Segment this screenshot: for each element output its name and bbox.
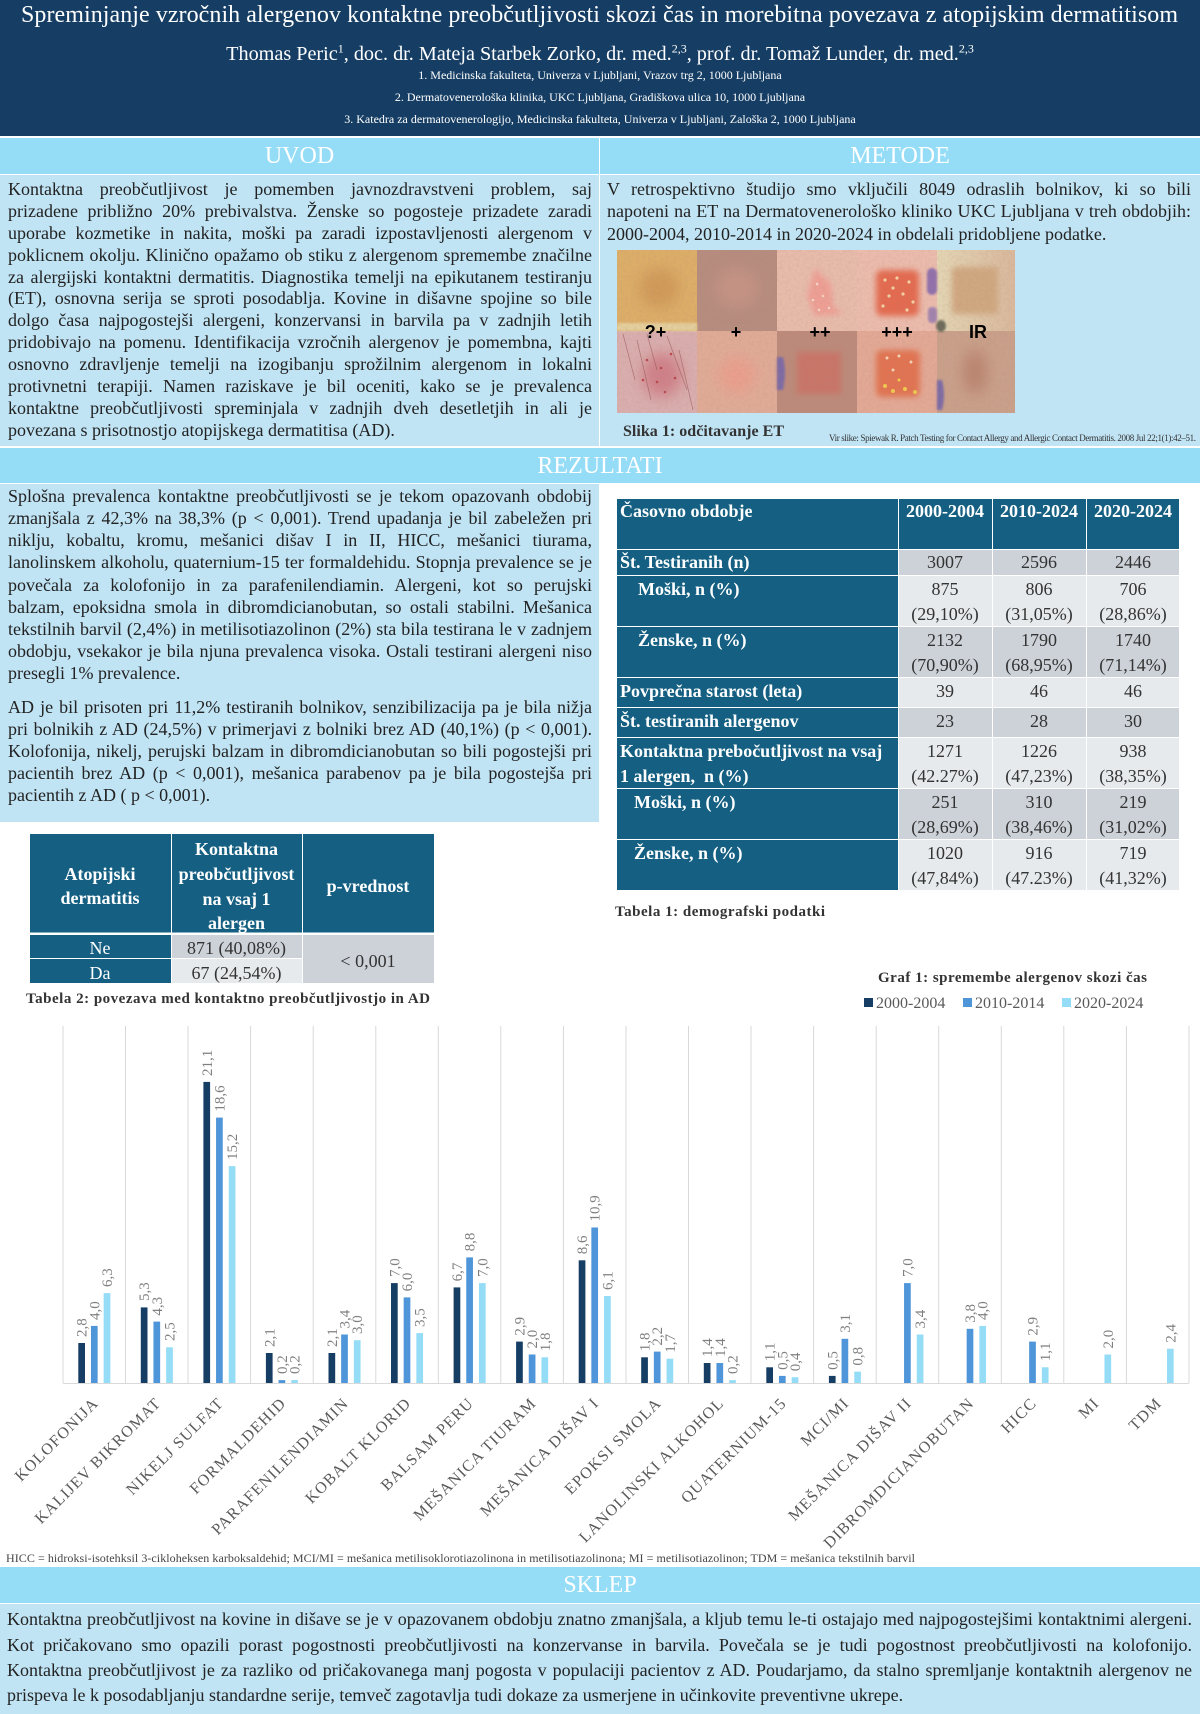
MEŠANICA DIŠAV II bars: 7,0 <box>900 1258 916 1277</box>
FORMALDEHID bars: 0,2 <box>275 1355 291 1374</box>
MCI/MI bars: 3,1 <box>838 1314 854 1333</box>
panel: rezultati text: zmanjšala z 42,3% na 38,3% (p < 0,001). Trend upadanja je bil zabeležen pri <box>8 508 592 528</box>
LANOLINSKI ALKOHOL bars: 1,4 <box>713 1338 729 1357</box>
heading: UVOD: UVOD <box>265 143 334 169</box>
MEŠANICA TIURAM bars: 2,0 <box>525 1330 541 1348</box>
table 2: association with atopic dermatitis: < 0,001 <box>340 951 396 971</box>
panel: uvod text: uporabe kozmetike in nakita, moški pa zaradi izpostavljenosti alergenom v <box>8 223 592 243</box>
HICC bars: 1,1 <box>1038 1343 1054 1361</box>
reading labels: +++ <box>881 322 913 342</box>
heading: METODE <box>600 138 1200 174</box>
KOLOFONIJA bars: 4,0 <box>87 1301 103 1320</box>
table 2: association with atopic dermatitis: dermatitis <box>61 888 139 908</box>
table 1: demographic data: 2020-2024 <box>1094 501 1172 521</box>
category axis labels: PARAFENILENDIAMIN <box>209 1395 352 1538</box>
HICC bars <box>1026 1317 1054 1383</box>
TDM bars <box>1163 1323 1179 1383</box>
image source: Vir slike: Spiewak R. Patch Testing for Contact Allergy and Allergic Contact Dermatitis. 2008 Jul 22;1(1):42–51. <box>829 433 1196 443</box>
PARAFENILENDIAMIN bars: 2,1 <box>325 1328 341 1347</box>
MCI/MI bars <box>825 1314 867 1383</box>
MEŠANICA DIŠAV I bars: 6,1 <box>600 1271 616 1290</box>
MEŠANICA DIŠAV II bars <box>900 1258 929 1383</box>
table 1: demographic data: 1 alergen, n (%) <box>620 766 748 787</box>
table 1: demographic data: Ženske, n (%) <box>638 629 747 651</box>
panel: rezultati text: pri bolnikih z AD (24,5%) v primerjavi z bolniki brez AD (40,1%) (p < 0,001). <box>8 719 592 739</box>
QUATERNIUM-15 bars: 0,5 <box>775 1351 791 1370</box>
panel: rezultati text: obdobju, vsekakor je bila njuna prevalenca visoka. Ostali testirani alergeni niso <box>8 641 592 661</box>
table 1: demographic data: 28 <box>1030 711 1048 731</box>
panel: uvod text: prizadene približno 20% prebivalstva. Ženske so pogosteje prizadete zaradi <box>8 201 592 221</box>
panel: uvod text: pridobivajo na pomenu. Identifikacija vzročnih alergenov je pomembna, kajti <box>8 332 592 352</box>
affiliation 1: 1. Medicinska fakulteta, Univerza v Ljubljani, Vrazov trg 2, 1000 Ljubljana <box>418 68 782 82</box>
panel: sklep text: Kot pričakovano smo opazili porast pogostnosti preobčutljivosti na konzervanse in barvila. Povečala se je tudi pogostnost preobčutljivosti na kolofonijo. <box>7 1634 1192 1654</box>
DIBROMDICIANOBUTAN bars: 4,0 <box>976 1301 992 1320</box>
panel: metode <box>600 175 1200 446</box>
table 1: demographic data: (42.27%) <box>911 766 979 787</box>
heading: REZULTATI: REZULTATI <box>537 453 663 479</box>
chart footnote: abbreviations: HICC = hidroksi-isotehksil 3-cikloheksen karboksaldehid; MCI/MI = mešanica metilisoklorotiazolinona in metilisotiazolinona; MI = metilisotiazolinon; TDM = mešanica tekstilnih barvil <box>6 1551 916 1565</box>
table 1: demographic data: 2446 <box>1115 552 1151 572</box>
category axis labels: MCI/MI <box>798 1395 853 1450</box>
panel: uvod text: povezana s prisotnostjo atopijskega dermatitisa (AD). <box>8 420 395 440</box>
QUATERNIUM-15 bars <box>763 1343 804 1383</box>
panel: sklep text: prispeva le k posodabljanju standardne serije, temveč zagotavlja tudi dokaze za usmerjene in učinkovite preventivne ukrepe. <box>7 1685 903 1705</box>
reading labels: + <box>731 322 741 342</box>
MI bars <box>1101 1330 1117 1383</box>
TDM bars: 2,4 <box>1163 1323 1179 1343</box>
category axis labels: HICC <box>998 1395 1040 1437</box>
heading: UVOD <box>0 138 599 174</box>
PARAFENILENDIAMIN bars: 3,4 <box>338 1309 354 1328</box>
EPOKSI SMOLA bars: 1,8 <box>638 1333 654 1351</box>
table 1: demographic data: (47.23%) <box>1005 868 1073 889</box>
chart legend: 2020-2024 <box>1074 995 1143 1012</box>
category axis labels: MEŠANICA DIŠAV II <box>784 1393 915 1525</box>
table 1: demographic data: (41,32%) <box>1099 868 1167 889</box>
MCI/MI bars: 0,8 <box>851 1347 867 1366</box>
table 1: demographic data: 2596 <box>1021 552 1057 572</box>
chart legend: 2010-2014 <box>975 995 1044 1012</box>
category axis labels: MEŠANICA DIŠAV I <box>476 1393 603 1520</box>
table 1: demographic data: (47,84%) <box>911 868 979 889</box>
KOLOFONIJA bars: 6,3 <box>100 1268 116 1287</box>
panel: rezultati text: pacientih z AD ( p < 0,001). <box>8 785 210 805</box>
panel: rezultati text: Splošna prevalenca kontaktne preobčutljivosti se je tekom opazovanh obdobij <box>8 486 592 506</box>
reading labels <box>646 325 987 338</box>
figure caption: Slika 1: odčitavanje ET <box>623 423 784 440</box>
category axis labels: LANOLINSKI ALKOHOL <box>576 1395 728 1546</box>
panel: sklep text: Kontaktna preobčutljivost na kovine in dišave se je v opazovanem obdobju znatno zmanjšala, a kljub temu le-ti ostajajo med najpogostejšimi kontaktnimi alergeni. <box>7 1609 1192 1629</box>
table 1: demographic data: 251 <box>932 792 958 812</box>
FORMALDEHID bars: 2,1 <box>262 1328 278 1347</box>
category axis labels: NIKELJ SULFAT <box>123 1395 227 1499</box>
table 1: demographic data: (31,02%) <box>1099 817 1167 838</box>
table 1: demographic data: 2000-2004 <box>906 501 984 521</box>
table 1: demographic data: 1226 <box>1021 741 1057 761</box>
metode text <box>607 179 1191 244</box>
table 1: demographic data: (31,05%) <box>1005 604 1073 625</box>
NIKELJ SULFAT bars: 18,6 <box>212 1085 228 1112</box>
table 1: demographic data: 938 <box>1120 741 1146 761</box>
table 1: demographic data: 1790 <box>1021 630 1057 650</box>
FORMALDEHID bars <box>262 1328 304 1383</box>
category axis labels: TDM <box>1126 1395 1165 1434</box>
table 1: demographic data: 30 <box>1124 711 1142 731</box>
category axis labels: FORMALDEHID <box>187 1395 290 1498</box>
table 1: demographic data: Št. Testiranih (n) <box>620 551 750 573</box>
MEŠANICA TIURAM bars <box>512 1317 554 1383</box>
table 2: association with atopic dermatitis: 67 (24,54%) <box>192 963 281 984</box>
KALIJEV BIKROMAT bars: 4,3 <box>150 1297 166 1316</box>
LANOLINSKI ALKOHOL bars: 0,2 <box>725 1355 741 1374</box>
panel: uvod text: poklicnem okolju. Klinično opažamo ob stiku z alergenom spremembe značilne <box>8 245 592 265</box>
table 1: demographic data: (71,14%) <box>1099 655 1167 676</box>
table 1: demographic data: Ženske, n (%) <box>634 842 743 864</box>
category axis labels: BALSAM PERU <box>378 1395 477 1494</box>
table 2: association with atopic dermatitis <box>30 834 434 984</box>
table 1: demographic data: (28,69%) <box>911 817 979 838</box>
KALIJEV BIKROMAT bars: 5,3 <box>137 1282 153 1301</box>
BALSAM PERU bars: 7,0 <box>475 1258 491 1277</box>
panel: rezultati text: Kolofonija, nikelj, perujski balzam in dibromdicianobutan so bili pogostejši pri <box>8 741 592 761</box>
BALSAM PERU bars: 8,8 <box>463 1233 479 1251</box>
table 1: demographic data: 1020 <box>927 843 963 863</box>
table 1: demographic data: (38,35%) <box>1099 766 1167 787</box>
QUATERNIUM-15 bars: 0,4 <box>788 1352 804 1371</box>
table 1: demographic data: Povprečna starost (leta) <box>620 681 802 702</box>
table 1: demographic data: (28,86%) <box>1099 604 1167 625</box>
PARAFENILENDIAMIN bars <box>325 1309 366 1383</box>
EPOKSI SMOLA bars: 1,7 <box>663 1333 679 1353</box>
reading labels: IR <box>969 322 987 342</box>
panel: uvod text <box>0 175 599 446</box>
table 2: association with atopic dermatitis: Da <box>90 963 110 983</box>
table 1 caption: Tabela 1: demografski podatki <box>615 904 825 920</box>
MEŠANICA DIŠAV I bars: 10,9 <box>588 1195 604 1222</box>
table 2: association with atopic dermatitis: alergen <box>208 913 265 933</box>
table 1: demographic data: 719 <box>1120 843 1146 863</box>
KOLOFONIJA bars <box>75 1268 116 1383</box>
metode text: V retrospektivno študijo smo vključili 8049 odraslih bolnikov, ki so bili <box>607 179 1191 199</box>
category axis labels: MEŠANICA TIURAM <box>409 1393 540 1524</box>
MEŠANICA DIŠAV I bars: 8,6 <box>575 1235 591 1254</box>
chart legend: 2000-2004 <box>876 995 945 1012</box>
chart title: Graf 1: spremembe alergenov skozi čas <box>878 970 1147 986</box>
MEŠANICA TIURAM bars: 2,9 <box>512 1317 528 1336</box>
QUATERNIUM-15 bars: 1,1 <box>763 1343 779 1361</box>
KOBALT KLORID bars <box>387 1258 429 1383</box>
MEŠANICA DIŠAV II bars: 3,4 <box>913 1309 929 1328</box>
reading labels: ?+ <box>645 322 666 342</box>
HICC bars: 2,9 <box>1026 1317 1042 1336</box>
chart legend <box>864 995 1144 1012</box>
heading: SKLEP <box>0 1567 1200 1603</box>
KOBALT KLORID bars: 3,5 <box>413 1308 429 1327</box>
table 2: association with atopic dermatitis: na vsaj 1 <box>202 889 271 909</box>
panel: rezultati text: niklju, kobaltu, kromu, mešanici dišav I in II, HICC, mešanici tiurama, <box>8 530 592 550</box>
panel: uvod text: dolgo časa najpogostejši alergeni, konzervansi in barvila pa v zadnjih letih <box>8 310 592 330</box>
EPOKSI SMOLA bars <box>638 1327 679 1383</box>
affiliation 3: 3. Katedra za dermatovenerologijo, Medicinska fakulteta, Univerza v Ljubljani, Zaloška 2, 1000 Ljubljana <box>344 112 856 126</box>
KOLOFONIJA bars: 2,8 <box>75 1318 91 1337</box>
table 2: association with atopic dermatitis: Ne <box>90 938 110 958</box>
metode text: napoteni na ET na Dermatovenerološko kliniko UKC Ljubljana v treh obdobjih: <box>607 201 1191 221</box>
affiliation 2: 2. Dermatovenerološka klinika, UKC Ljubljana, Gradiškova ulica 10, 1000 Ljubljana <box>395 90 805 104</box>
category axis labels: QUATERNIUM-15 <box>678 1395 790 1507</box>
table 1: demographic data: 3007 <box>927 552 963 572</box>
category axis labels: MI <box>1076 1395 1103 1422</box>
category axis labels: KALIJEV BIKROMAT <box>32 1395 165 1527</box>
panel: uvod text: osnovno zdravljenje temelji na izogibanju sprožilnim alergenom in lokalni <box>8 354 592 374</box>
panel: rezultati text <box>0 484 599 822</box>
BALSAM PERU bars <box>450 1233 491 1383</box>
table 1: demographic data: 219 <box>1120 792 1146 812</box>
MCI/MI bars: 0,5 <box>825 1351 841 1370</box>
table 1: demographic data: (68,95%) <box>1005 655 1073 676</box>
LANOLINSKI ALKOHOL bars <box>700 1338 742 1383</box>
table 1: demographic data: (29,10%) <box>911 604 979 625</box>
table 1: demographic data: 23 <box>936 711 954 731</box>
LANOLINSKI ALKOHOL bars: 1,4 <box>700 1338 716 1357</box>
authors: Thomas Peric1, doc. dr. Mateja Starbek Zorko, dr. med.2,3, prof. dr. Tomaž Lunder, dr. med.2,3 <box>226 41 974 65</box>
panel: rezultati text: AD je bil prisoten pri 11,2% testiranih bolnikov, senzibilizacija pa je bila nižja <box>8 697 592 717</box>
table 1: demographic data: 706 <box>1120 579 1146 599</box>
KOBALT KLORID bars: 6,0 <box>400 1273 416 1291</box>
heading: SKLEP: SKLEP <box>563 1572 637 1598</box>
table 2: association with atopic dermatitis: preobčutljivost <box>179 864 294 884</box>
table 2: association with atopic dermatitis: p-vrednost <box>327 876 409 896</box>
panel: rezultati text: povečala za kolofonijo in za parafenilendiamin. Alergeni, kot so perujski <box>8 574 592 594</box>
table 1: demographic data: 806 <box>1026 579 1052 599</box>
DIBROMDICIANOBUTAN bars <box>963 1301 992 1383</box>
table 1: demographic data: 46 <box>1030 681 1048 701</box>
table 1: demographic data: 2132 <box>927 630 963 650</box>
panel: rezultati text: tekstilnih barvil (2,4%) in metilisotiazolinon (2%) sta bila testirana le v zadnjem <box>8 619 592 639</box>
DIBROMDICIANOBUTAN bars: 3,8 <box>963 1304 979 1323</box>
category axis labels <box>12 1393 1165 1552</box>
panel: rezultati text: pacientih brez AD (p < 0,001), mešanica parabenov pa je bila pogostejša pri <box>8 763 592 783</box>
EPOKSI SMOLA bars: 2,2 <box>650 1327 666 1346</box>
category axis labels: EPOKSI SMOLA <box>562 1395 665 1498</box>
BALSAM PERU bars: 6,7 <box>450 1262 466 1281</box>
panel: sklep text <box>0 1604 1200 1714</box>
table 1: demographic data: Moški, n (%) <box>634 792 736 813</box>
heading: METODE: METODE <box>850 143 950 169</box>
table 1: demographic data: 916 <box>1026 843 1052 863</box>
panel: uvod text: kontaktne preobčutljivosti spreminjala v zadnjih dveh desetletjih in ali je <box>8 398 592 418</box>
table 1: demographic data: Kontaktna prebočutljivost na vsaj <box>620 741 882 761</box>
KALIJEV BIKROMAT bars: 2,5 <box>163 1322 179 1341</box>
NIKELJ SULFAT bars: 15,2 <box>225 1134 241 1160</box>
MEŠANICA DIŠAV I bars <box>575 1195 616 1383</box>
panel: rezultati text: presegli 1% prevalence. <box>8 663 180 683</box>
table 1: demographic data: Št. testiranih alergenov <box>620 710 798 731</box>
table 1: demographic data: (38,46%) <box>1005 817 1073 838</box>
category axis labels: DIBROMDICIANOBUTAN <box>821 1395 978 1552</box>
table 1: demographic data: 1740 <box>1115 630 1151 650</box>
category axis labels: KOLOFONIJA <box>12 1395 102 1485</box>
NIKELJ SULFAT bars: 21,1 <box>200 1050 216 1076</box>
header banner <box>0 0 1200 136</box>
KOBALT KLORID bars: 7,0 <box>387 1258 403 1277</box>
table 1: demographic data: Moški, n (%) <box>638 579 740 600</box>
MI bars: 2,0 <box>1101 1330 1117 1348</box>
panel: rezultati text: lanolinskem alkoholu, quaternium-15 ter formaldehidu. Stopnja prevalence se je <box>8 552 592 572</box>
table 2: association with atopic dermatitis: 871 (40,08%) <box>187 938 286 959</box>
panel: uvod text: Kontaktna preobčutljivost je pomemben javnozdravstveni problem, saj <box>8 179 592 199</box>
panel: uvod text: za alergijski kontaktni dermatitis. Diagnostika temelji na epikutanem testiranju <box>8 266 592 286</box>
reading labels: ++ <box>809 322 831 342</box>
heading: REZULTATI <box>0 448 1200 483</box>
table 2: association with atopic dermatitis: Kontaktna <box>195 839 278 859</box>
table 1: demographic data: 39 <box>936 681 954 701</box>
table 1: demographic data: 1271 <box>927 741 963 761</box>
KALIJEV BIKROMAT bars <box>137 1282 178 1383</box>
title: Spreminjanje vzročnih alergenov kontaktne preobčutljivosti skozi čas in morebitna povezava z atopijskim dermatitisom <box>21 2 1178 28</box>
metode text: 2000-2004, 2010-2014 in 2020-2024 in obdelali pridobljene podatke. <box>607 224 1106 244</box>
NIKELJ SULFAT bars <box>200 1050 241 1383</box>
table 1: demographic data: (47,23%) <box>1005 766 1073 787</box>
table 1: demographic data: (70,90%) <box>911 655 979 676</box>
table 2: association with atopic dermatitis: Atopijski <box>64 864 136 884</box>
table 1: demographic data: 875 <box>932 579 958 599</box>
MEŠANICA TIURAM bars: 1,8 <box>538 1333 554 1351</box>
PARAFENILENDIAMIN bars: 3,0 <box>350 1315 366 1334</box>
panel: uvod text: protivnetni terapiji. Namen raziskave je bil oceniti, kako se je prevalenca <box>8 376 592 396</box>
figure: patch test photographs <box>617 250 1015 413</box>
table 1: demographic data: 46 <box>1124 681 1142 701</box>
FORMALDEHID bars: 0,2 <box>288 1355 304 1374</box>
table 1: demographic data: 310 <box>1026 792 1052 812</box>
table 2 caption: Tabela 2: povezava med kontaktno preobčutljivostjo in AD <box>26 991 430 1007</box>
table 1: demographic data: Časovno obdobje <box>620 500 753 521</box>
panel: rezultati text: balzam, epoksidna smola in dibromdicianobutan, so ostali stabilni. Mešanica <box>8 597 592 617</box>
table 1: demographic data: 2010-2024 <box>1000 501 1078 521</box>
panel: uvod text: (ET), osnovna serija se sproti posodablja. Kovine in dišavne spojine so bile <box>8 288 592 308</box>
panel: sklep text: Kontaktna preobčutljivost je za razliko od pričakovanega manj pogosta v populaciji pacientov z AD. Poudarjamo, da stalno spremljanje kontaktnih alergenov ne <box>7 1660 1192 1680</box>
category axis labels: KOBALT KLORID <box>302 1395 415 1507</box>
